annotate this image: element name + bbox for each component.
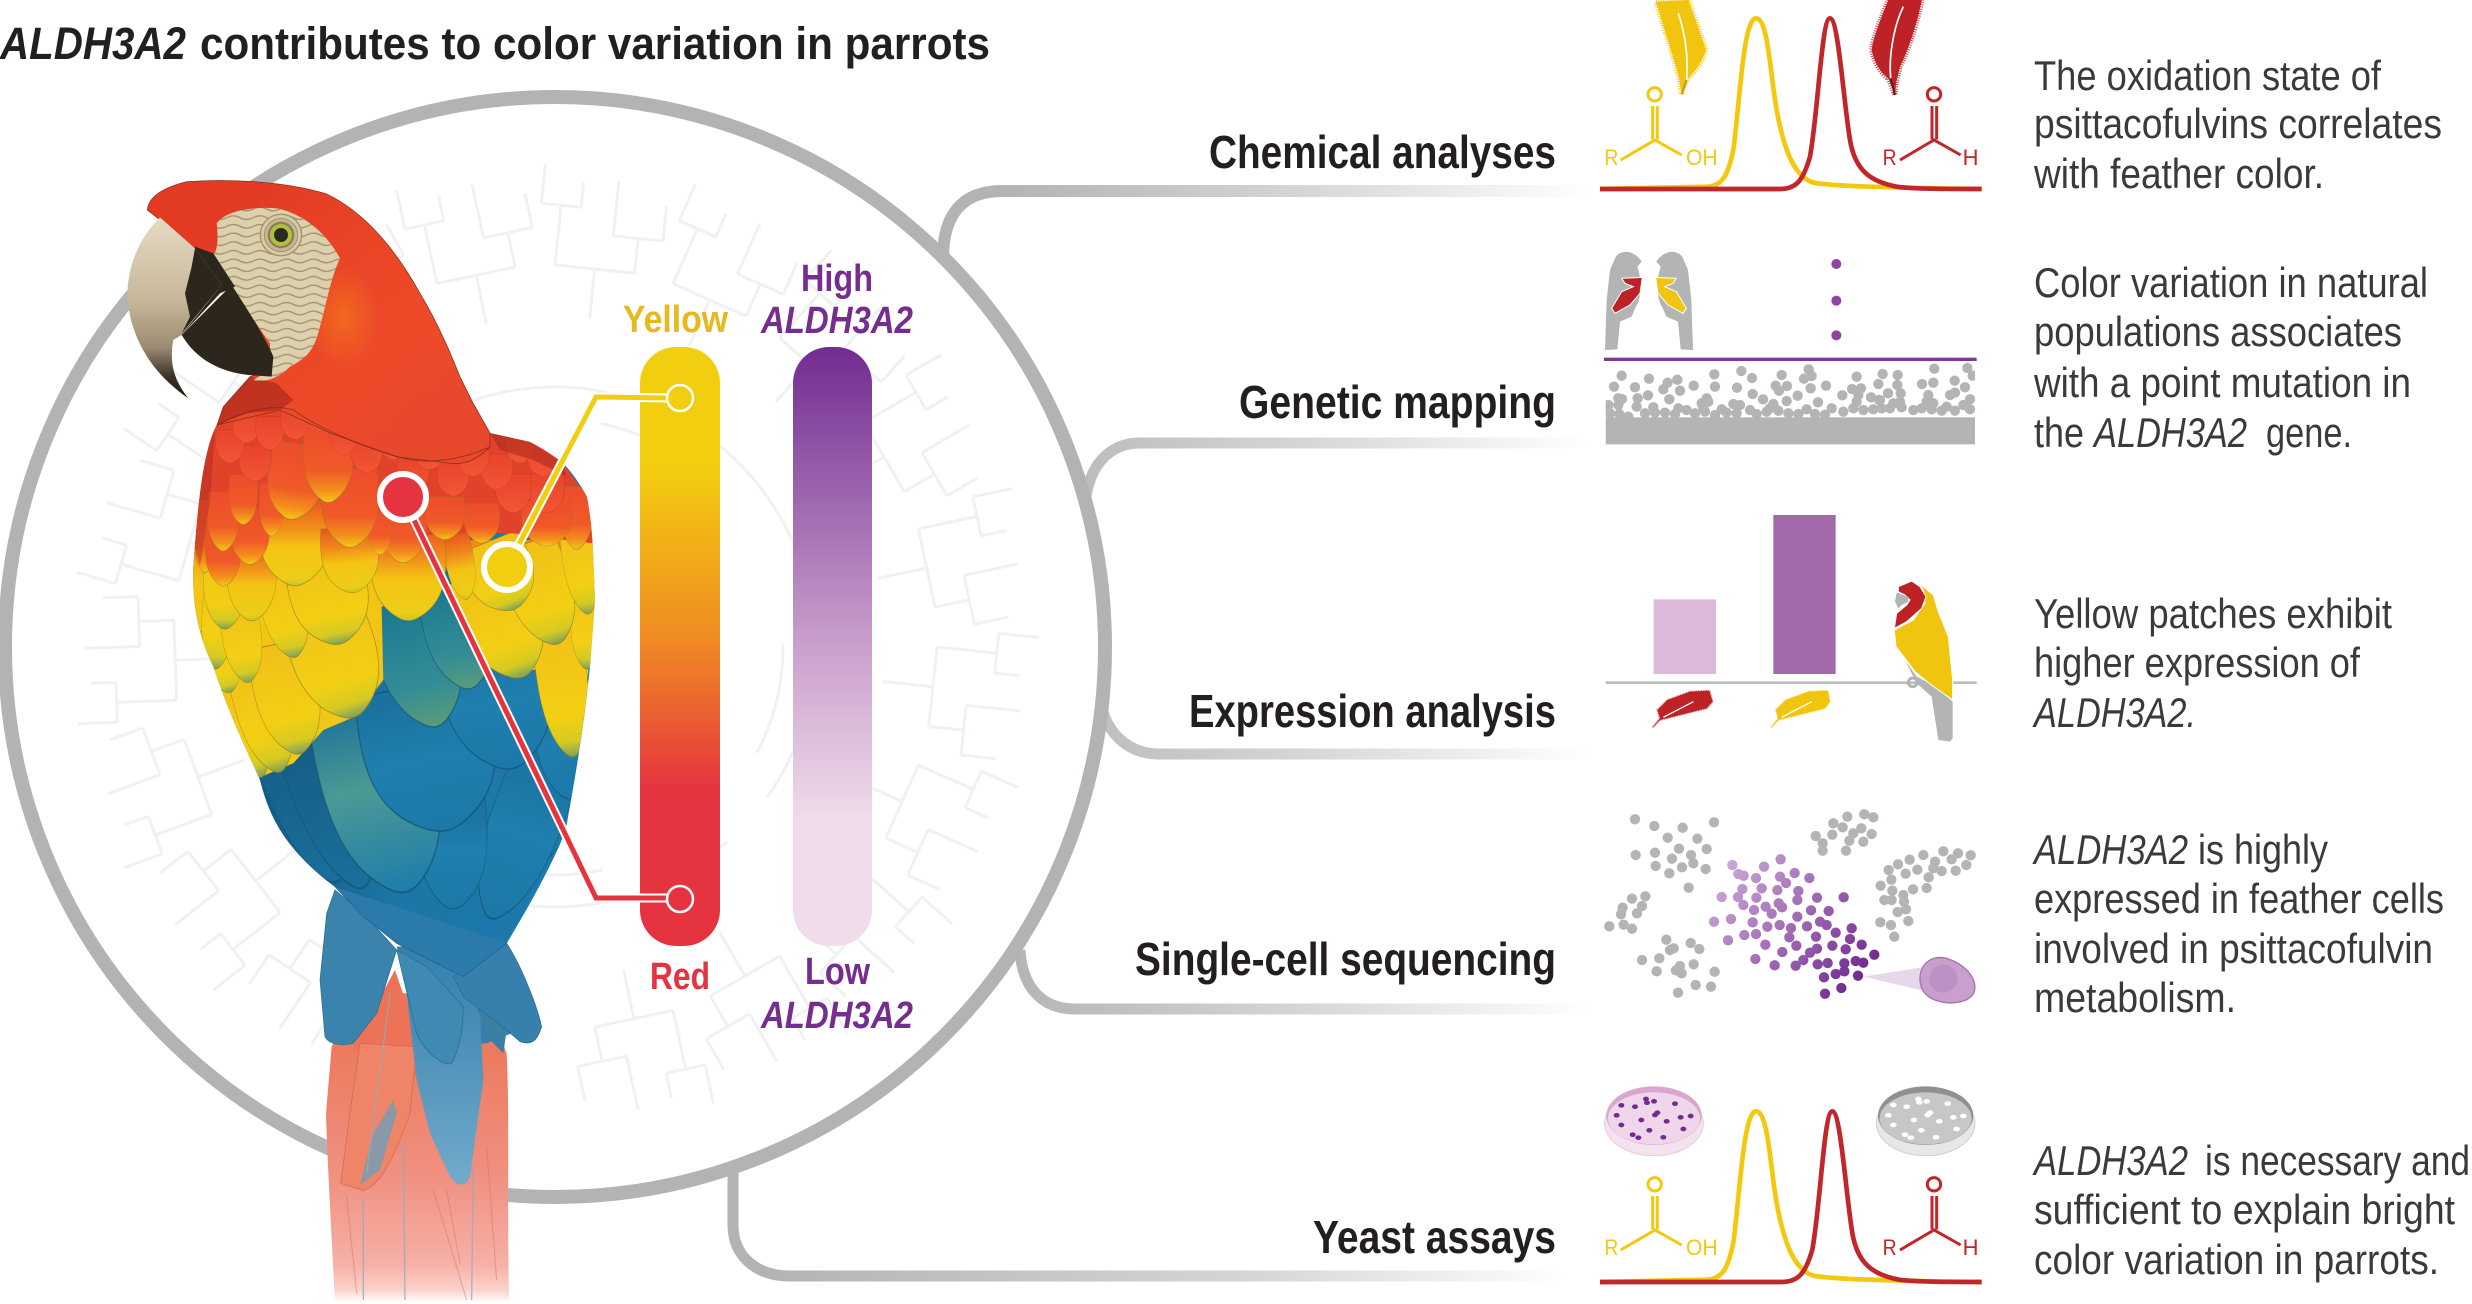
label: low ALDH3A2: Low <box>805 951 870 993</box>
red feather icon <box>1872 0 1922 95</box>
marker: red feather patch <box>380 474 426 520</box>
bar: yellow feathers <box>1773 515 1836 674</box>
heading: Expression analysis: Expression analysis <box>1189 685 1556 737</box>
text: chemical analyses finding <box>2033 52 2442 197</box>
significant points <box>1831 259 1841 340</box>
connector: chemical analyses <box>943 191 1590 258</box>
chart: yeast assays <box>1600 1086 1982 1282</box>
carboxylic acid structure <box>1604 88 1718 170</box>
aldehyde structure <box>1883 1178 1979 1260</box>
carboxylic acid structure: OH <box>1686 145 1718 170</box>
label: Yellow: Yellow <box>623 299 728 341</box>
connector: expression analysis <box>1100 700 1590 754</box>
face wrinkles <box>212 208 340 381</box>
label: high ALDH3A2: High <box>801 258 873 300</box>
text: single-cell finding: metabolism. <box>2034 974 2236 1021</box>
text: expression finding: Yellow patches exhibit <box>2034 590 2392 637</box>
neck shading <box>217 377 293 425</box>
large circle frame <box>5 97 1105 1197</box>
purple cell cluster <box>1709 854 1879 999</box>
yellow wing underlay <box>193 540 384 776</box>
red-patched parrot silhouette <box>1605 252 1642 350</box>
yellow feather icon <box>1771 691 1830 727</box>
gradient bar: feather color <box>640 347 720 946</box>
parrot icon <box>1894 581 1953 742</box>
gradient bar: ALDH3A2 expression <box>793 347 872 946</box>
connector: genetic mapping <box>1085 443 1590 505</box>
text: single-cell finding: is highly <box>2198 826 2328 873</box>
text: genetic mapping finding: gene. <box>2266 409 2352 456</box>
text: expression finding: higher expression of <box>2034 639 2360 686</box>
magnified cell <box>1863 957 1975 1003</box>
title: contributes to color variation in parrots <box>200 18 990 69</box>
red scale feathers <box>216 405 565 513</box>
bare face patch <box>212 208 340 381</box>
text: genetic mapping finding: the <box>2034 409 2084 456</box>
blue feathers <box>229 566 612 931</box>
aldehyde structure: R <box>1883 145 1897 170</box>
chromatogram curves <box>1600 18 1982 189</box>
red to yellow transition feathers <box>192 423 593 595</box>
title: ALDH3A2 <box>0 18 186 69</box>
heading: Yeast assays: Yeast assays <box>1313 1211 1556 1263</box>
petri dish: purple colonies <box>1605 1086 1703 1156</box>
text: expression finding <box>2032 590 2392 736</box>
aldehyde structure <box>1883 88 1979 170</box>
chart: expression bar chart <box>1606 515 1977 742</box>
text: genetic mapping finding: populations associates <box>2034 308 2402 355</box>
text: yeast assays finding: ALDH3A2 <box>2032 1137 2188 1184</box>
heading: Single-cell sequencing: Single-cell sequencing <box>1135 933 1556 985</box>
text: genetic mapping finding: ALDH3A2 <box>2092 409 2247 456</box>
red body base <box>195 400 593 547</box>
gray cell clusters <box>1604 809 1976 998</box>
carboxylic acid structure: R <box>1604 145 1618 170</box>
axis <box>1606 681 1977 684</box>
text: genetic mapping finding <box>2033 259 2428 456</box>
text: expression finding: ALDH3A2. <box>2032 689 2196 736</box>
connector: yeast assays <box>733 1170 1570 1276</box>
label: Red: Red <box>650 956 710 998</box>
heading: Chemical analyses: Chemical analyses <box>1209 126 1556 178</box>
scarlet macaw illustration <box>127 180 612 1303</box>
gray scatter points <box>1603 363 1978 444</box>
shoulder shading <box>490 433 567 477</box>
red leader line <box>403 497 693 912</box>
aldehyde structure: R <box>1883 1235 1897 1260</box>
yellow feather icon <box>1656 0 1706 94</box>
dark gape underlay <box>182 247 235 335</box>
chromatogram curves <box>1600 1111 1982 1282</box>
chart: single-cell scatter plot <box>1604 809 1976 1003</box>
label: high ALDH3A2: ALDH3A2 <box>760 300 913 342</box>
phylogenetic tree background <box>73 163 1039 1130</box>
aldehyde structure: H <box>1963 145 1979 170</box>
petri dish: white colonies <box>1876 1086 1975 1156</box>
heading: Genetic mapping: Genetic mapping <box>1239 376 1556 428</box>
text: chemical analyses finding: with feather color. <box>2033 150 2324 197</box>
red head and neck <box>147 180 490 464</box>
cere dark patch <box>182 248 222 333</box>
upper mandible <box>127 217 222 398</box>
significance threshold line <box>1604 358 1977 361</box>
text: chemical analyses finding: The oxidation state of <box>2034 52 2381 99</box>
yellow leader line <box>507 385 693 567</box>
tail feathers and coverts <box>320 887 542 1303</box>
marker: yellow feather patch <box>484 544 530 590</box>
aldehyde structure: H <box>1963 1235 1979 1260</box>
carboxylic acid structure: OH <box>1686 1235 1718 1260</box>
eye <box>260 214 302 256</box>
red feather icon <box>1653 691 1713 727</box>
bar: red feathers <box>1654 599 1716 674</box>
text: genetic mapping finding: with a point mutation in <box>2033 359 2411 406</box>
carboxylic acid structure: R <box>1604 1235 1618 1260</box>
text: yeast assays finding <box>2032 1137 2470 1283</box>
head, neck and beak <box>127 180 490 464</box>
carboxylic acid structure <box>1604 1178 1718 1260</box>
label: high ALDH3A2 <box>760 258 913 342</box>
text: single-cell finding: ALDH3A2 <box>2032 826 2188 873</box>
wing and body feathers <box>190 400 612 943</box>
connector: single-cell sequencing <box>1020 950 1590 1009</box>
chart: genetic mapping Manhattan plot <box>1603 252 1978 444</box>
lower mandible <box>182 285 273 377</box>
label: low ALDH3A2 <box>760 951 913 1037</box>
label: low ALDH3A2: ALDH3A2 <box>760 995 913 1037</box>
yellow-patched parrot silhouette <box>1656 252 1693 350</box>
yellow feathers <box>196 520 606 786</box>
chart: chemical analyses chromatogram <box>1600 0 1982 189</box>
text: single-cell finding <box>2032 826 2444 1021</box>
